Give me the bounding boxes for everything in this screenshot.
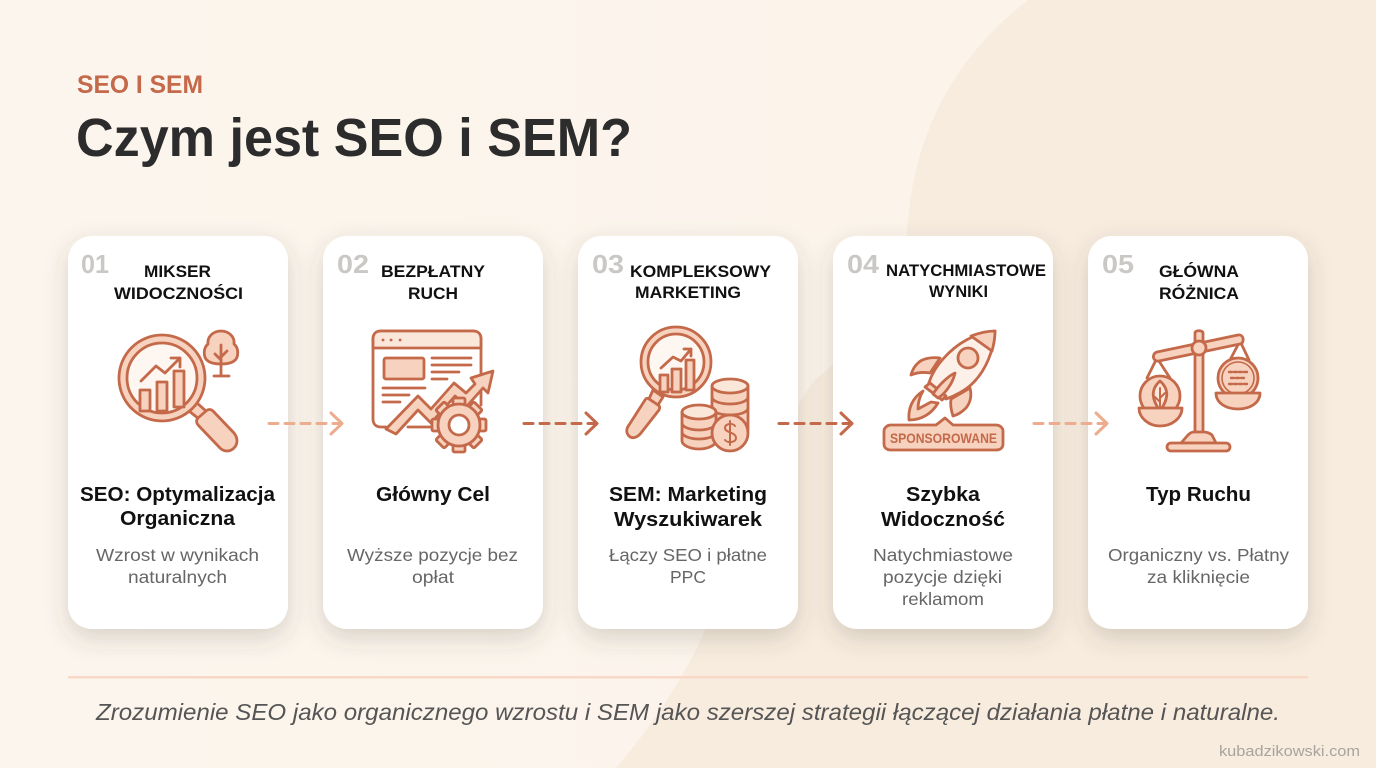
description: Łączy SEO i płatne — [609, 545, 767, 565]
label: Mikser widoczności: WIDOCZNOŚCI — [114, 284, 243, 303]
icon: browser window with arrow and gear — [373, 331, 493, 452]
heading: Wyszukiwarek — [614, 509, 763, 531]
description: Wzrost w wynikach — [96, 545, 259, 565]
number 01: 01 — [81, 249, 109, 279]
heading: Szybka — [906, 484, 981, 506]
description — [1108, 545, 1289, 587]
heading: SEM: Marketing — [609, 484, 767, 506]
description: Wyższe pozycje bez — [347, 545, 518, 565]
arrow 2 — [524, 413, 597, 434]
icon: magnifier with chart and tree — [119, 331, 238, 451]
label: Główna różnica: RÓŻNICA — [1159, 284, 1239, 303]
heading — [881, 484, 1005, 531]
label: Mikser widoczności — [114, 262, 243, 303]
description: reklamom — [902, 589, 984, 609]
heading: SEO: Optymalizacja — [80, 484, 276, 506]
label: Kompleksowy marketing: KOMPLEKSOWY — [630, 262, 772, 281]
heading: Widoczność — [881, 509, 1005, 531]
description — [873, 545, 1013, 609]
label: Kompleksowy marketing — [630, 262, 772, 302]
arrow 3 — [779, 413, 852, 434]
panel: card 05 — [1088, 236, 1308, 629]
arrow 1 — [269, 413, 342, 434]
number 03: 03 — [592, 249, 624, 279]
label: Bezpłatny ruch: RUCH — [408, 284, 458, 303]
icon: rocket with sponsored badge — [884, 331, 1003, 450]
label: Bezpłatny ruch: BEZPŁATNY — [381, 262, 486, 281]
number 04: 04 — [847, 249, 880, 279]
description — [96, 545, 259, 587]
heading — [609, 484, 767, 531]
summary text: Zrozumienie SEO jako organicznego wzrostu i SEM jako szerszej strategii łączącej działania płatne i naturalne. — [95, 699, 1280, 725]
description: PPC — [670, 567, 706, 587]
description: za kliknięcie — [1147, 567, 1250, 587]
label: Natychmiastowe wyniki: NATYCHMIASTOWE — [886, 261, 1046, 280]
description: naturalnych — [128, 567, 227, 587]
label: Główna różnica — [1159, 262, 1239, 303]
panel: card 03 — [578, 236, 798, 629]
icon: balance scale — [1139, 331, 1260, 451]
description — [609, 545, 767, 587]
heading: Główny Cel — [376, 484, 490, 506]
panel: card 04 — [833, 236, 1053, 629]
heading: Organiczna — [120, 508, 236, 530]
number 05: 05 — [1102, 249, 1134, 279]
panel: card 01 — [68, 236, 288, 629]
label: Kompleksowy marketing: MARKETING — [635, 283, 741, 302]
label: Mikser widoczności: MIKSER — [144, 262, 211, 281]
eyebrow: SEO I SEM — [77, 71, 203, 99]
icon: magnifier and coins — [627, 327, 748, 451]
label: Główna różnica: GŁÓWNA — [1159, 262, 1239, 281]
description: Natychmiastowe — [873, 545, 1013, 565]
watermark: kubadzikowski.com — [1219, 743, 1360, 760]
panel: card 02 — [323, 236, 543, 629]
description: pozycje dzięki — [883, 567, 1002, 587]
label: Natychmiastowe wyniki — [886, 261, 1046, 301]
heading: Typ Ruchu — [1146, 484, 1251, 506]
arrow 4 — [1034, 413, 1107, 434]
title: Czym jest SEO i SEM? — [76, 108, 632, 168]
number 02: 02 — [337, 249, 369, 279]
label: Natychmiastowe wyniki: WYNIKI — [929, 282, 988, 301]
badge text: SPONSOROWANE — [890, 430, 997, 446]
description — [347, 545, 518, 587]
heading — [80, 484, 276, 530]
label: Bezpłatny ruch — [381, 262, 486, 303]
description: opłat — [412, 567, 454, 587]
description: Organiczny vs. Płatny — [1108, 545, 1289, 565]
